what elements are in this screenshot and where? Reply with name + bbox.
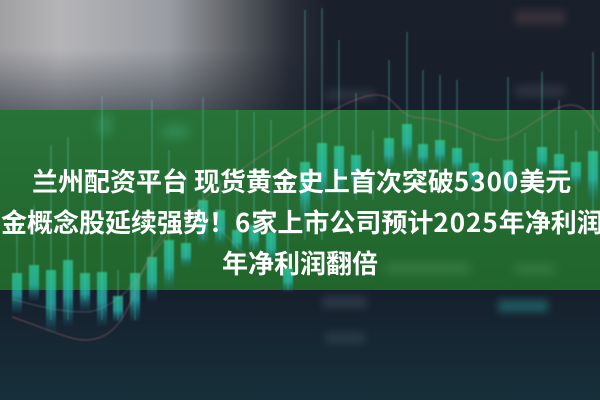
background: blurred grey gradient [0, 0, 310, 110]
title line 1: 兰州配资平台 现货黄金史上首次突破5300美元 [32, 162, 571, 199]
trend lines [12, 95, 600, 340]
title line 2: 金概念股延续强势！6家上市公司预计2025年净利润 [1, 203, 600, 240]
candle bodies [12, 124, 598, 332]
green banner [0, 110, 600, 290]
title line 3: 年净利润翻倍 [222, 244, 378, 281]
wicks [17, 8, 593, 320]
